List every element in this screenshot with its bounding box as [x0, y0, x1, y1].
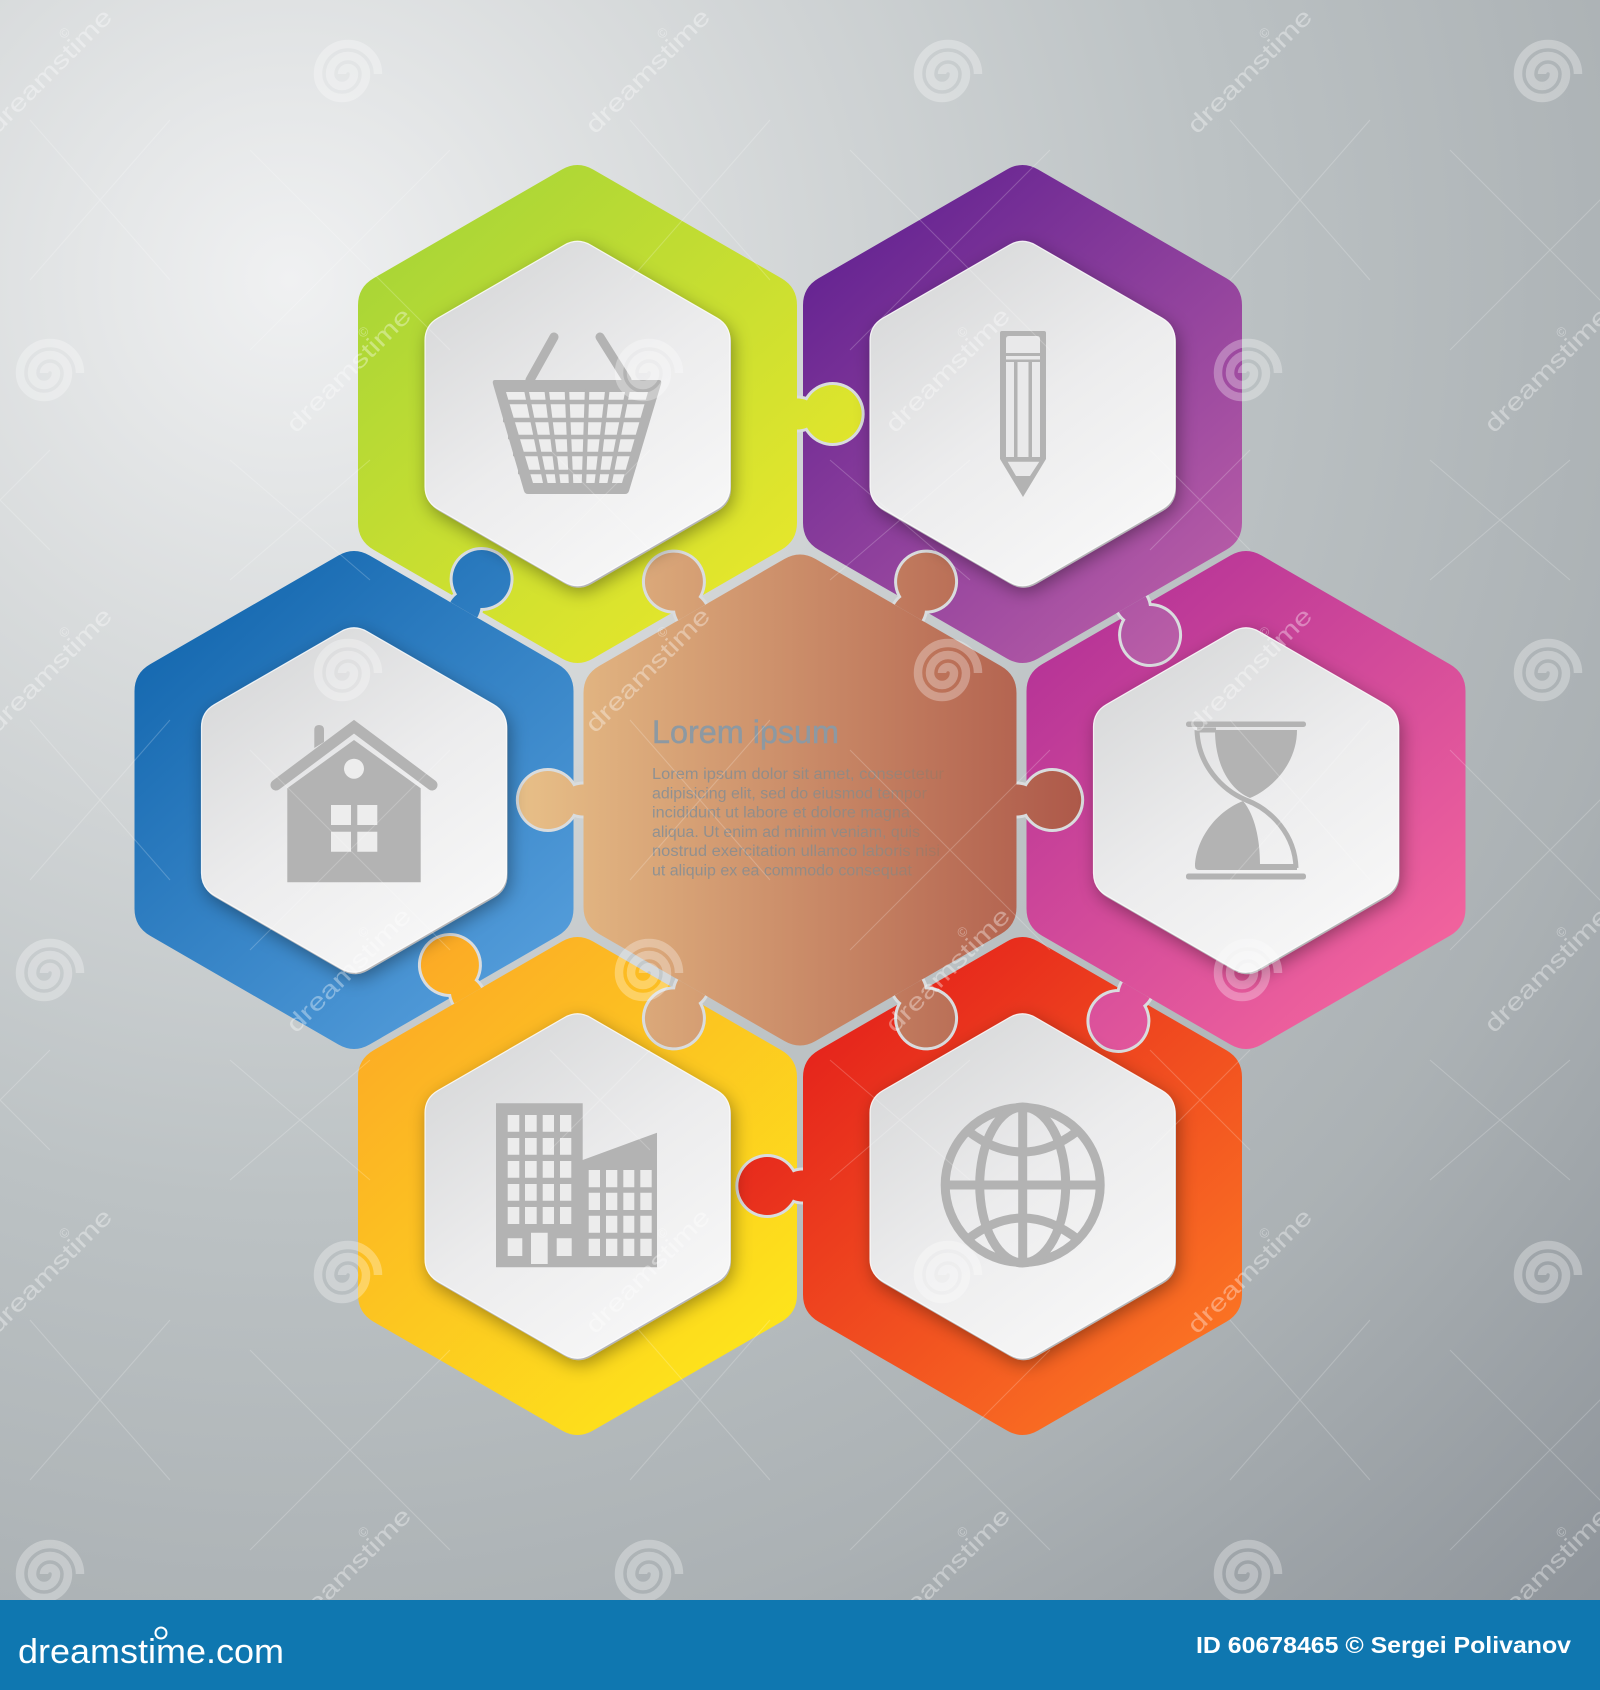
- body copy: aliqua. Ut enim ad minim veniam, quis: [652, 824, 920, 841]
- panel: globe plate: [870, 1014, 1176, 1360]
- footer credit: ID 60678465 © Sergei Polivanov: [1196, 1632, 1571, 1658]
- hexagon body: purple: [803, 165, 1242, 663]
- hexagon body: blue: [134, 551, 574, 1049]
- watermark text: ©: [1553, 323, 1570, 341]
- watermark text: dreamstime: [580, 3, 716, 139]
- puzzle tab: purple into magenta: [1119, 596, 1179, 664]
- watermark text: dreamstime: [1182, 3, 1318, 139]
- panel: pencil plate: [870, 241, 1176, 588]
- watermark text: dreamstime: [1479, 1502, 1600, 1638]
- watermark text: dreamstime: [1479, 902, 1600, 1038]
- hexagon body: orange: [358, 937, 797, 1435]
- watermark text: dreamstime: [880, 1502, 1016, 1638]
- watermark text: ©: [355, 323, 372, 341]
- watermark text: ©: [56, 1224, 73, 1242]
- watermark text: dreamstime: [1182, 602, 1318, 738]
- panel: buildings plate: [425, 1014, 731, 1360]
- puzzle tab: magenta into red: [1089, 982, 1150, 1050]
- body copy: [652, 766, 944, 880]
- puzzle tab: red into orange: [738, 1157, 803, 1215]
- watermark text: ©: [355, 1523, 372, 1541]
- watermark text: dreamstime: [281, 902, 417, 1038]
- hexagon body: centre: [584, 554, 1016, 1046]
- white hexagon plate: [425, 241, 731, 588]
- watermark text: ©: [954, 1523, 971, 1541]
- watermark text: dreamstime: [880, 902, 1016, 1038]
- white hexagon plate: [202, 628, 508, 974]
- panel: hourglass plate: [1094, 628, 1400, 974]
- watermark text: ©: [56, 623, 73, 641]
- watermark text: ©: [355, 923, 372, 941]
- puzzle tab: orange into blue: [421, 936, 481, 1004]
- body copy: adipisicing elit, sed do eiusmod tempor: [652, 785, 927, 802]
- body copy: ut aliquip ex ea commodo consequat: [652, 862, 913, 880]
- white hexagon plate: [870, 1014, 1176, 1360]
- watermark text: dreamstime: [281, 1502, 417, 1638]
- panel: house plate: [202, 628, 508, 974]
- watermark text: dreamstime: [580, 1203, 716, 1339]
- icon: house: [276, 725, 432, 882]
- watermark text: ©: [654, 24, 671, 42]
- puzzle tab: blue into green: [450, 550, 511, 618]
- watermark text: ©: [56, 24, 73, 42]
- body copy: Lorem ipsum dolor sit amet, consectetur: [652, 766, 944, 783]
- hexagon body: magenta: [1026, 551, 1466, 1049]
- watermark text: ©: [1553, 923, 1570, 941]
- footer logo: dreamstime.com: [18, 1633, 284, 1671]
- watermark text: ©: [1553, 1523, 1570, 1541]
- icon: shopping basket: [493, 337, 661, 494]
- icon: office buildings: [496, 1103, 657, 1267]
- watermark text: ©: [954, 323, 971, 341]
- watermark text: dreamstime: [1479, 302, 1600, 438]
- watermark text: dreamstime: [580, 602, 716, 738]
- hexagon body: red: [803, 937, 1242, 1435]
- puzzle tabs: centre hexagon into all six neighbours: [519, 553, 1081, 1047]
- hexagon body: green: [358, 165, 797, 663]
- puzzle tab: green into purple: [797, 385, 862, 443]
- watermark text: ©: [1256, 1224, 1273, 1242]
- icon: hourglass: [1186, 722, 1306, 880]
- watermark text: ©: [654, 1224, 671, 1242]
- panel: basket plate: [425, 241, 731, 588]
- watermark text: ©: [1256, 623, 1273, 641]
- body copy: incididunt ut labore et dolore magna: [652, 805, 910, 822]
- watermark text: ©: [1256, 24, 1273, 42]
- watermark text: dreamstime: [1182, 1203, 1318, 1339]
- watermark text: ©: [954, 923, 971, 941]
- footer bar: [0, 1600, 1600, 1690]
- white hexagon plate: [425, 1014, 731, 1360]
- watermark text: dreamstime: [880, 302, 1016, 438]
- icon: globe: [945, 1107, 1101, 1263]
- text block: centre hexagon: [652, 714, 944, 880]
- icon: pencil: [1000, 331, 1046, 497]
- white hexagon plate: [1094, 628, 1400, 974]
- heading: Lorem ipsum: [652, 714, 839, 750]
- watermark text: ©: [654, 623, 671, 641]
- white hexagon plate: [870, 241, 1176, 588]
- body copy: nostrud exercitation ullamco laboris nisi: [652, 843, 940, 860]
- watermark text: dreamstime: [281, 302, 417, 438]
